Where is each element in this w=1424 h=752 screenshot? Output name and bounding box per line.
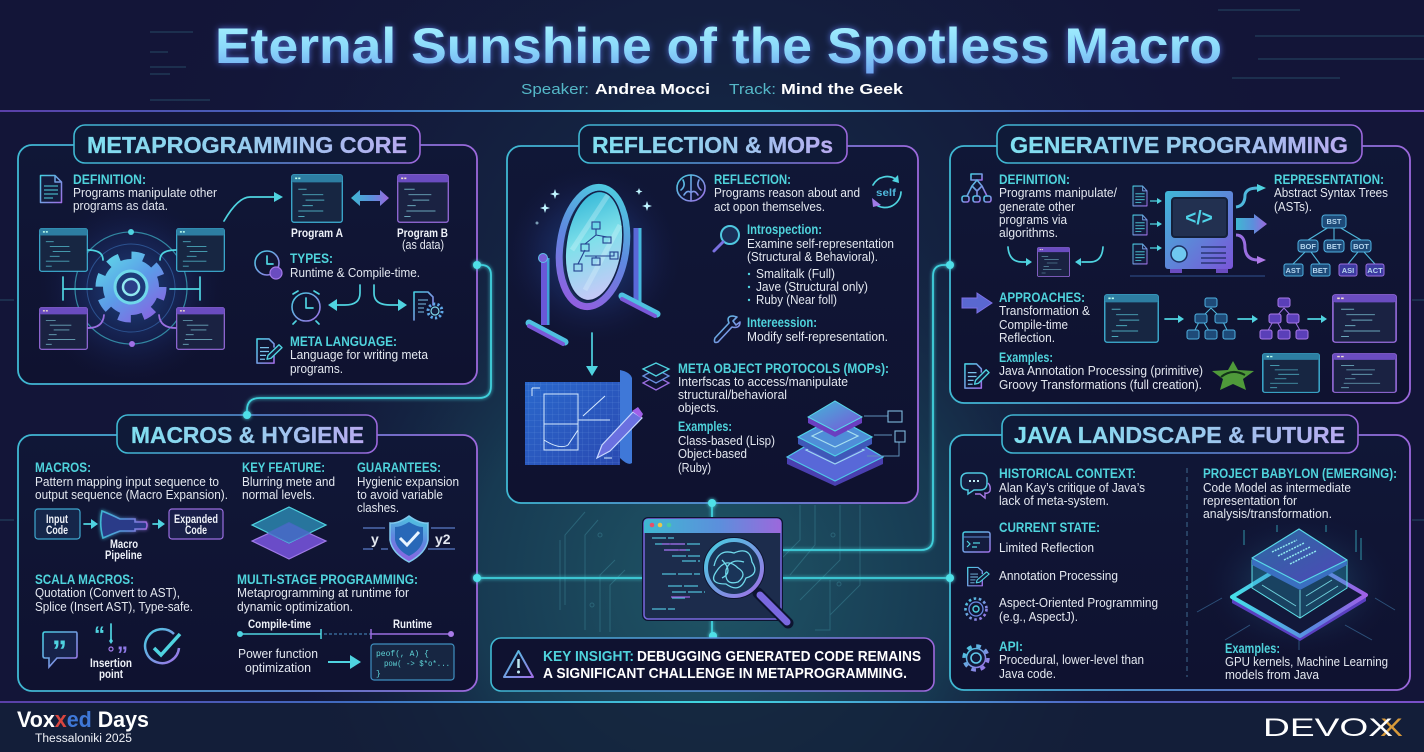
API text: API: xyxy=(999,639,1023,654)
types text xyxy=(290,251,420,280)
icon: shield with variables xyxy=(363,516,455,562)
logo: Devoxx: DEVOX xyxy=(1263,714,1393,742)
icon: clock with badge xyxy=(255,251,282,279)
meta language text xyxy=(290,334,428,376)
AST tree: BET xyxy=(1326,242,1342,251)
icon: aspect gear xyxy=(966,598,986,620)
MOP examples text: Object-based xyxy=(678,447,747,461)
MOPs text xyxy=(678,361,889,415)
double arrow xyxy=(351,190,389,206)
guarantees text xyxy=(357,460,459,515)
approaches text: Reflection. xyxy=(999,331,1055,345)
AST tree: BST xyxy=(1326,217,1342,226)
macros text: MACROS: xyxy=(35,460,91,475)
reflection text: Programs reason about and xyxy=(714,186,860,200)
icon: layers xyxy=(643,363,669,390)
historical context text: HISTORICAL CONTEXT: xyxy=(999,466,1136,481)
mirror illustration xyxy=(504,167,680,344)
subtitle: speaker and track xyxy=(521,81,904,98)
types text: Runtime & Compile-time. xyxy=(290,266,420,280)
historical context text: Alan Kay’s critique of Java’s xyxy=(999,481,1145,495)
optimized code box xyxy=(371,644,454,680)
heading: java landscape and future xyxy=(1002,415,1358,453)
heading: java landscape and future: JAVA LANDSCAPE & FUTURE xyxy=(1014,422,1345,448)
macros text xyxy=(35,460,228,502)
MOPs text: Interfscas to access/manipulate xyxy=(678,375,848,389)
definition text: Programs manipulate/ xyxy=(999,186,1118,200)
MOP examples text xyxy=(678,419,775,475)
heading: macros and hygiene xyxy=(117,415,377,453)
icon: meta language document xyxy=(257,339,282,363)
AST tree xyxy=(1284,215,1384,276)
panel frame xyxy=(507,146,918,503)
generator machine xyxy=(1130,191,1265,276)
introspection text: Introspection: xyxy=(747,222,822,237)
subtitle: speaker and track: Andrea Mocci xyxy=(595,81,710,98)
icon: brain xyxy=(677,175,705,201)
icon: wrench xyxy=(714,316,740,342)
transformation pipeline xyxy=(1105,295,1396,342)
subtitle: speaker and track: Track: xyxy=(729,81,776,98)
icon: self cycle xyxy=(872,175,901,208)
generated window with arrows xyxy=(1008,247,1103,277)
power function label: Power function xyxy=(238,647,318,661)
approaches text: APPROACHES: xyxy=(999,290,1085,305)
MOPs text: structural/behavioral xyxy=(678,388,787,402)
insertion point diagram: point xyxy=(99,669,123,681)
babylon examples text: GPU kernels, Machine Learning xyxy=(1225,655,1388,669)
arrow: to optimized code xyxy=(328,655,361,669)
definition text: programs via xyxy=(999,213,1067,227)
icon: alarm clock with arrow xyxy=(292,285,360,324)
arrow: to program A xyxy=(224,192,283,221)
macros text: output sequence (Macro Expansion). xyxy=(35,488,228,502)
key insight text: A SIGNIFICANT CHALLENGE IN METAPROGRAMMING. xyxy=(543,665,907,682)
meta language text: Language for writing meta xyxy=(290,348,428,362)
insertion point diagram: ” xyxy=(117,642,128,667)
icon: examples document xyxy=(965,364,989,388)
subtitle: speaker and track: Mind the Geek xyxy=(781,81,904,98)
isometric layer stack xyxy=(787,401,905,486)
panel: metaprogramming core xyxy=(18,125,477,384)
meta language text: META LANGUAGE: xyxy=(290,334,397,349)
current state heading: CURRENT STATE: xyxy=(999,520,1100,535)
historical context text xyxy=(999,466,1145,508)
output arrows xyxy=(1236,184,1267,264)
babylon examples text: models from Java xyxy=(1225,668,1319,682)
logo: Devoxx xyxy=(1263,714,1403,742)
representation text: (ASTs). xyxy=(1274,200,1312,214)
icon: warning triangle xyxy=(504,651,533,677)
icon: shield with variables: y2 xyxy=(435,531,451,547)
panel: macros and hygiene xyxy=(18,415,477,691)
macro pipeline diagram: Input xyxy=(46,514,68,526)
program B window: Program B xyxy=(397,228,448,240)
macro pipeline diagram: Pipeline xyxy=(105,550,142,562)
panel frame xyxy=(950,435,1410,690)
icon: hierarchy xyxy=(962,174,991,202)
icon: shield with variables: y xyxy=(371,531,379,547)
language list xyxy=(748,267,868,307)
input documents xyxy=(1133,186,1162,264)
multi-stage programming text: MULTI-STAGE PROGRAMMING: xyxy=(237,572,418,587)
optimized code box: } xyxy=(376,670,381,679)
heading: generative programming xyxy=(997,125,1362,163)
project babylon text: PROJECT BABYLON (EMERGING): xyxy=(1203,466,1397,481)
macro pipeline diagram: Code xyxy=(46,525,68,537)
item: limited reflection: Limited Reflection xyxy=(999,541,1094,555)
intercession text xyxy=(747,315,888,344)
multi-stage programming text xyxy=(237,572,418,614)
approaches text xyxy=(999,290,1091,345)
program B window xyxy=(397,175,448,252)
language list: Jave (Structural only) xyxy=(756,280,868,294)
representation text: REPRESENTATION: xyxy=(1274,172,1384,187)
optimized code box: peof(, A) { xyxy=(376,650,429,659)
guarantees text: to avoid variable xyxy=(357,488,443,502)
item: aspect-oriented programming: Aspect-Oriented Programming xyxy=(999,596,1158,610)
icon: check circle xyxy=(145,629,180,663)
definition text: algorithms. xyxy=(999,226,1058,240)
guarantees text: clashes. xyxy=(357,501,399,515)
timeline: Compile-time xyxy=(248,619,311,631)
macro pipeline diagram: Expanded xyxy=(174,514,218,526)
item: aspect-oriented programming: (e.g., AspectJ). xyxy=(999,610,1078,624)
icon: document gear with arrow xyxy=(374,285,442,320)
icon: annotation document xyxy=(968,567,989,586)
heading: generative programming: GENERATIVE PROGRAMMING xyxy=(1010,132,1348,158)
panel frame xyxy=(950,146,1410,403)
heading: metaprogramming core xyxy=(74,125,420,163)
callout: key insight xyxy=(491,638,934,691)
key feature text: normal levels. xyxy=(242,488,315,502)
project babylon text xyxy=(1203,466,1397,521)
intercession text: Intereession: xyxy=(747,315,817,330)
icon: magnifier xyxy=(714,226,739,251)
API text: Procedural, lower-level than xyxy=(999,653,1144,667)
key feature text: Blurring mete and xyxy=(242,475,335,489)
representation text xyxy=(1274,172,1388,214)
panel: java landscape and future xyxy=(950,415,1410,690)
examples text: Groovy Transformations (full creation). xyxy=(999,378,1202,392)
icon: quote bubble xyxy=(43,632,77,668)
logo: Voxxed Days: Voxxed Days xyxy=(17,707,149,732)
babylon examples text xyxy=(1225,641,1388,682)
API text xyxy=(999,639,1144,681)
AST tree: ASI xyxy=(1342,266,1354,275)
item: aspect-oriented programming xyxy=(999,596,1158,624)
logo: Voxxed Days: Thessaloniki 2025 xyxy=(35,733,132,745)
panel: reflection and MOPs xyxy=(504,125,918,503)
macro pipeline diagram: Macro xyxy=(110,539,138,551)
AST tree: ACT xyxy=(1367,266,1383,275)
logo: Devoxx: X xyxy=(1380,714,1403,742)
macro pipeline diagram xyxy=(35,509,223,562)
introspection text: Examine self-representation xyxy=(747,237,894,251)
approaches text: Compile-time xyxy=(999,318,1068,332)
examples text: Java Annotation Processing (primitive) xyxy=(999,364,1203,378)
definition text: DEFINITION: xyxy=(999,172,1070,187)
definition text: Programs manipulate other xyxy=(73,186,217,200)
babylon examples text: Examples: xyxy=(1225,641,1280,656)
reflection text: REFLECTION: xyxy=(714,172,791,187)
icon: code file xyxy=(40,176,62,202)
project babylon text: representation for xyxy=(1203,494,1297,508)
panel: generative programming xyxy=(950,125,1410,403)
generator machine: </> xyxy=(1185,208,1213,229)
gear hub diagram xyxy=(39,198,224,382)
icon: quote bubble: ” xyxy=(52,635,67,668)
MOPs text: objects. xyxy=(678,401,719,415)
heading: reflection and MOPs: REFLECTION & MOPs xyxy=(592,132,833,158)
AST tree: BOT xyxy=(1353,242,1369,251)
icon: API gear xyxy=(964,646,988,670)
project babylon text: analysis/transformation. xyxy=(1203,507,1332,521)
reflection text xyxy=(714,172,860,214)
multi-stage programming text: dynamic optimization. xyxy=(237,600,353,614)
language list: Smalitalk (Full) xyxy=(756,267,835,281)
examples text xyxy=(999,350,1203,392)
historical context text: lack of meta-system. xyxy=(999,494,1109,508)
logo: Voxxed Days xyxy=(17,707,149,745)
language list: Ruby (Near foll) xyxy=(756,293,837,307)
icon: layered planes xyxy=(252,507,326,559)
optimized code box: pow( -> $*o*... xyxy=(384,660,450,669)
API text: Java code. xyxy=(999,667,1056,681)
introspection text xyxy=(747,222,894,264)
project babylon text: Code Model as intermediate xyxy=(1203,481,1351,495)
icon: approaches arrow xyxy=(962,293,992,313)
key feature text xyxy=(242,460,335,502)
connectors between panels xyxy=(243,261,954,640)
header divider xyxy=(0,110,1424,112)
item: annotation processing: Annotation Processing xyxy=(999,569,1118,583)
definition text: generate other xyxy=(999,200,1075,214)
definition text: DEFINITION: xyxy=(73,172,146,187)
arrow: mirror to blueprint xyxy=(586,333,598,376)
footer divider xyxy=(0,701,1424,703)
scala macros text: SCALA MACROS: xyxy=(35,572,134,587)
example code windows xyxy=(1263,354,1396,392)
key insight text xyxy=(543,648,921,682)
key insight text: KEY INSIGHT: xyxy=(543,648,634,665)
icon: terminal xyxy=(963,532,990,552)
program A window: Program A xyxy=(291,228,343,240)
icon: groovy star xyxy=(1212,361,1254,390)
scala macros text: Splice (Insert AST), Type-safe. xyxy=(35,600,193,614)
icon: self cycle: self xyxy=(876,188,897,199)
scala macros text xyxy=(35,572,193,614)
MOP examples text: (Ruby) xyxy=(678,461,711,475)
definition text xyxy=(73,172,217,213)
heading: metaprogramming core: METAPROGRAMMING CORE xyxy=(87,132,407,158)
definition text xyxy=(999,172,1118,240)
examples text: Examples: xyxy=(999,350,1053,365)
guarantees text: Hygienic expansion xyxy=(357,475,459,489)
insertion point diagram: “ xyxy=(94,622,105,647)
definition text: programs as data. xyxy=(73,199,168,213)
program B window: (as data) xyxy=(402,238,444,252)
heading: reflection and MOPs xyxy=(579,125,847,163)
macro pipeline diagram: Code xyxy=(185,525,207,537)
panel frame xyxy=(18,435,477,691)
MOP examples text: Class-based (Lisp) xyxy=(678,434,775,448)
macros text: Pattern mapping input sequence to xyxy=(35,475,219,489)
subtitle: speaker and track: Speaker: xyxy=(521,81,589,98)
intercession text: Modify self-representation. xyxy=(747,330,888,344)
code model chip illustration xyxy=(1197,515,1395,655)
insertion point diagram: Insertion xyxy=(90,658,132,670)
debugging window illustration xyxy=(643,518,788,623)
icon: chat bubbles xyxy=(961,473,990,498)
panel frame xyxy=(18,145,477,384)
types text: TYPES: xyxy=(290,251,333,266)
key insight text: DEBUGGING GENERATED CODE REMAINS xyxy=(637,648,921,665)
multi-stage programming text: Metaprogramming at runtime for xyxy=(237,586,409,600)
blueprint illustration xyxy=(525,370,643,465)
introspection text: (Structural & Behavioral). xyxy=(747,250,878,264)
timeline: Runtime xyxy=(393,619,432,631)
AST tree: AST xyxy=(1286,266,1301,275)
approaches text: Transformation & xyxy=(999,304,1091,318)
program A window xyxy=(291,175,343,240)
heading: macros and hygiene: MACROS & HYGIENE xyxy=(131,422,364,448)
reflection text: act opon themselves. xyxy=(714,200,825,214)
AST tree: BET xyxy=(1312,266,1328,275)
AST tree: BOF xyxy=(1300,242,1316,251)
timeline xyxy=(237,619,454,639)
key feature text: KEY FEATURE: xyxy=(242,460,325,475)
scala macros text: Quotation (Convert to AST), xyxy=(35,586,180,600)
title: Eternal Sunshine of the Spotless Macro xyxy=(215,18,1222,74)
representation text: Abstract Syntax Trees xyxy=(1274,186,1388,200)
insertion point diagram xyxy=(90,622,132,681)
guarantees text: GUARANTEES: xyxy=(357,460,441,475)
power function label: optimization xyxy=(245,661,311,675)
MOP examples text: Examples: xyxy=(678,419,732,434)
power function label xyxy=(238,647,318,675)
meta language text: programs. xyxy=(290,362,343,376)
MOPs text: META OBJECT PROTOCOLS (MOPs): xyxy=(678,361,889,376)
